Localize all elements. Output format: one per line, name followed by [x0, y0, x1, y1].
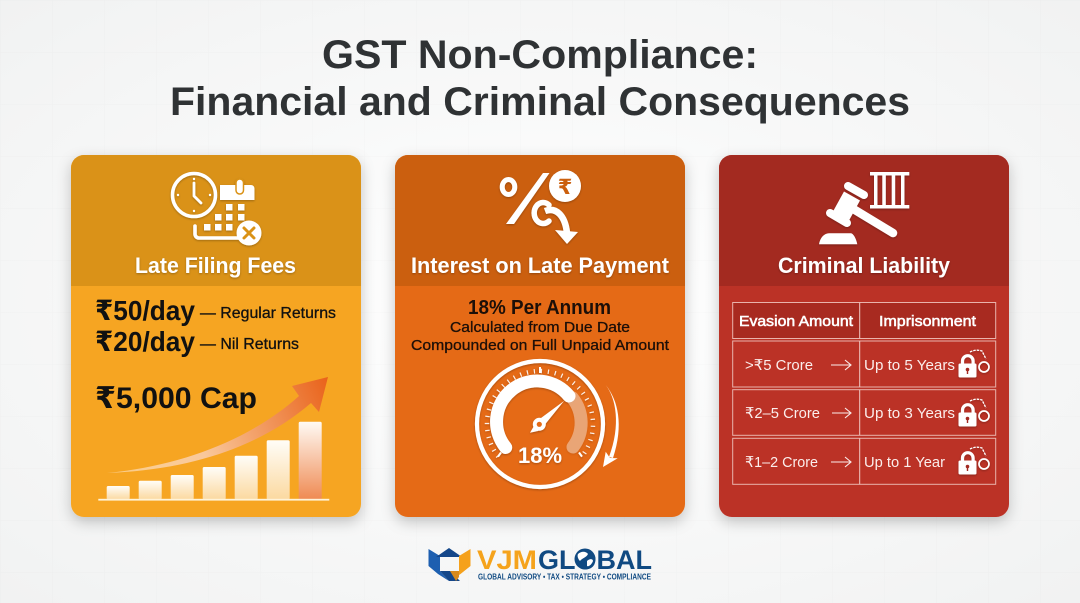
heading: Interest on Late Payment: [411, 253, 670, 278]
row: 1 to 2 crore: [733, 438, 996, 484]
logo: VJM Global: [428, 545, 652, 582]
panel: late filing fees: [71, 155, 361, 517]
calculation note: Calculated from Due Date: [450, 319, 630, 336]
row: above 5 crore: >₹5 Crore: [745, 357, 813, 374]
card header band: [719, 155, 1009, 286]
regular returns fee: [95, 295, 336, 326]
logo wordmark: VJM: [477, 545, 537, 575]
icon: lock and handcuff: [958, 447, 989, 474]
icon: gauge at 18 percent: 18%: [518, 443, 562, 468]
row: 1 to 2 crore: ₹1–2 Crore: [745, 454, 818, 471]
card header band: [395, 155, 685, 286]
icon: clock and calendar: [172, 174, 262, 246]
regular returns fee: — Regular Returns: [200, 305, 336, 322]
icon: percent, rupee coin and arrow: ₹: [558, 176, 572, 199]
calculation note: Compounded on Full Unpaid Amount: [411, 337, 670, 354]
arrow: compounding direction: [603, 385, 619, 467]
heading: Late Filing Fees: [135, 253, 296, 278]
bar chart with rising arrow: [98, 377, 329, 501]
calculation note: [411, 319, 670, 354]
icon: lock and handcuff: [958, 399, 989, 426]
card background: [395, 155, 685, 517]
title: GST Non-Compliance:: [322, 33, 758, 77]
panel: interest on late payment: [395, 155, 685, 517]
card header band: [71, 155, 361, 286]
row: above 5 crore: [733, 341, 996, 387]
panel: criminal liability: [719, 155, 1009, 517]
logo tagline: GLOBAL ADVISORY • TAX • STRATEGY • COMPLIANCE: [478, 572, 651, 582]
penalty table: [733, 302, 996, 484]
icon: gauge at 18 percent: [477, 361, 603, 487]
nil returns fee: — Nil Returns: [200, 336, 299, 353]
table header: Evasion Amount: [739, 313, 854, 330]
card background: [719, 155, 1009, 517]
card background: [71, 155, 361, 517]
icon: gavel and prison bars: [819, 172, 909, 244]
logo mark: [428, 548, 470, 581]
nil returns fee: [95, 326, 299, 357]
row: 1 to 2 crore: Up to 1 Year: [864, 454, 945, 471]
logo: VJM Global: GLOBAL: [538, 545, 652, 575]
heading: Criminal Liability: [778, 253, 951, 278]
row: 2 to 5 crore: Up to 3 Years: [864, 405, 955, 422]
row: 2 to 5 crore: ₹2–5 Crore: [745, 405, 820, 422]
row: 2 to 5 crore: [733, 390, 996, 435]
nil returns fee: ₹20/day: [95, 326, 195, 357]
icon: lock and handcuff: [958, 350, 989, 378]
regular returns fee: ₹50/day: [95, 295, 195, 326]
title: Financial and Criminal Consequences: [170, 80, 910, 124]
title: [170, 33, 910, 124]
table header: [733, 302, 996, 338]
icon: globe in wordmark: [574, 548, 596, 570]
table header: Imprisonment: [879, 313, 977, 330]
interest rate: 18% Per Annum: [468, 296, 611, 319]
fee cap: ₹5,000 Cap: [95, 382, 257, 415]
icon: percent, rupee coin and arrow: [502, 170, 581, 244]
row: above 5 crore: Up to 5 Years: [864, 357, 955, 374]
